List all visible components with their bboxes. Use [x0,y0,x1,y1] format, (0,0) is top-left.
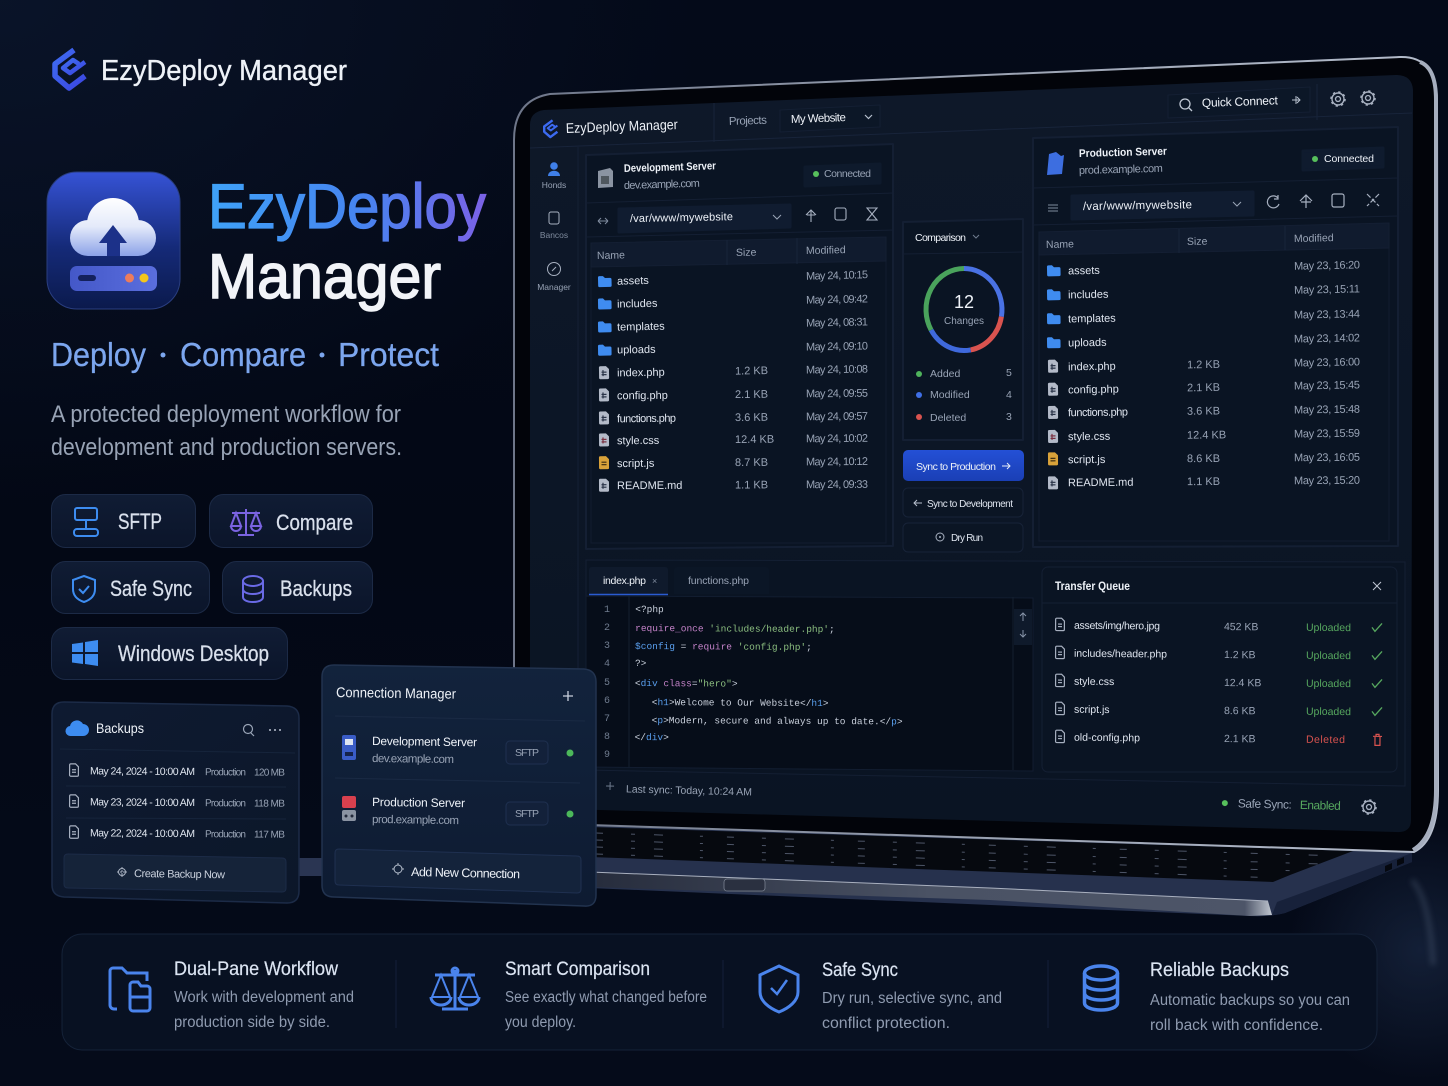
button: add connection: Add New Connection [411,865,520,881]
feature: reliable backups: roll back with confidence. [1150,1017,1323,1034]
sidebar [537,147,578,810]
feature: safe sync: conflict protection. [822,1015,950,1032]
file list: May 23, 15:45 [1294,379,1360,392]
queue row [1056,730,1382,746]
backup row: May 24, 2024 - 10:00 AM [90,765,195,778]
backup row: Production [205,829,246,840]
button: dry run [903,523,1023,552]
file list: style.css [1068,431,1111,443]
tagline: Deploy [51,336,146,373]
queue row: 452 KB [1224,621,1258,633]
legend: Modified [930,389,970,401]
donut center: 12 [954,292,974,312]
file list: script.js [1068,454,1106,466]
icon: cloud [65,720,89,736]
file list: 1.2 KB [735,365,768,378]
project selector [780,105,880,132]
file list: README.md [1068,477,1133,489]
file list: includes [617,298,658,311]
queue row: includes/header.php [1074,648,1167,661]
icons: settings [1331,91,1375,106]
queue row [1056,646,1382,662]
path bar: /var/www/mywebsite [630,211,733,225]
projects label: Projects [729,115,767,128]
panel: transfer queue [1042,567,1397,772]
icon: database [1084,966,1118,1010]
code: ?> [635,658,647,669]
panel: code editor [586,567,1033,771]
card heading: Connection Manager [336,684,456,702]
connection: development [342,734,574,766]
file list: May 24, 09:10 [806,340,868,353]
file table header: Modified [1294,232,1334,245]
legend: 3 [1006,411,1012,423]
file list: May 23, 15:20 [1294,475,1360,487]
quick connect: Quick Connect [1202,93,1279,110]
file list: May 24, 09:33 [806,479,868,491]
file list: config.php [617,390,668,402]
path bar [1048,192,1379,219]
icon: plus [563,691,573,701]
icon: brand logo [55,50,85,88]
line numbers: 3 [604,641,610,652]
backup row: 118 MB [254,799,285,810]
line numbers: 7 [604,714,610,725]
icon: manager [548,262,560,276]
icon: backup [549,212,559,224]
feature: smart comparison: See exactly what changed before [505,989,707,1006]
legend: Deleted [930,412,966,424]
file list: 8.7 KB [735,457,768,469]
backup row: 117 MB [254,830,285,841]
file list: 1.1 KB [735,479,768,492]
feature: dual-pane workflow: Dual-Pane Workflow [174,959,338,980]
file list: 1.1 KB [1187,476,1220,488]
queue row: Uploaded [1306,650,1351,662]
connection: development: Development Server [372,734,477,749]
queue row: style.css [1074,676,1114,688]
icon: status settings [1362,800,1376,814]
app header bar [530,84,1412,148]
file list: May 24, 10:02 [806,433,868,445]
queue row [1056,702,1382,718]
file list: May 23, 13:44 [1294,308,1360,321]
status bar [606,781,1341,813]
tagline: Compare [180,336,306,373]
brand name: EzyDeploy Manager [101,55,347,87]
queue row: Uploaded [1306,678,1351,690]
file list: 12.4 KB [1187,429,1226,442]
donut center: Changes [944,316,984,327]
file table header: Name [1046,238,1074,251]
status pill [1303,148,1383,170]
icon: app logo [544,120,557,137]
line numbers: 6 [604,696,610,707]
feature strip [62,934,1377,1050]
code: require_once 'includes/header.php'; [635,623,835,635]
button: create backup [64,854,286,892]
icon: folders [110,968,150,1011]
backup row: 120 MB [254,768,285,779]
file list: May 23, 15:48 [1294,404,1360,416]
queue row: old-config.php [1074,732,1140,744]
description: A protected deployment workflow for [51,401,401,428]
backup row [70,795,285,810]
feature: smart comparison: Smart Comparison [505,959,650,980]
file list: 8.6 KB [1187,453,1220,465]
feature: dual-pane workflow: Work with development and [174,989,354,1006]
file list: May 24, 09:55 [806,388,868,400]
description: development and production servers. [51,434,402,461]
tab: index.php: index.php [603,575,646,587]
file table header: Size [1187,236,1208,248]
file list: 1.2 KB [1187,359,1220,371]
connection: production: Production Server [372,795,465,810]
file list: 2.1 KB [1187,382,1220,394]
tab: functions.php [674,567,769,594]
server icon [1047,152,1064,175]
queue row: 1.2 KB [1224,649,1256,661]
tab: index.php [589,567,668,594]
server title: prod.example.com [1079,163,1163,177]
donut chart [926,268,1002,351]
button: sync to development: Sync to Development [927,499,1013,510]
file list: May 24, 09:57 [806,411,868,423]
line numbers: 8 [604,732,610,743]
file list: README.md [617,480,682,492]
chip: Windows Desktop: Windows Desktop [118,641,269,666]
file list: May 24, 10:08 [806,363,868,376]
card tools [244,724,281,736]
brand header [55,50,347,88]
feature: reliable backups: Reliable Backups [1150,960,1289,981]
feature: reliable backups: Automatic backups so you can [1150,992,1350,1009]
feature: safe sync [760,960,1002,1032]
file table header: Modified [806,244,846,257]
laptop [298,57,1438,916]
backup row [70,764,285,779]
file list: functions.php [1068,406,1128,419]
sidebar: Manager [537,282,571,292]
code: <p>Modern, secure and always up to date.</p> [652,715,903,727]
chip: Compare [210,494,372,548]
chip: Compare: Compare [276,510,353,535]
title: Manager [208,242,441,312]
panel: comparison [903,219,1023,440]
editor side toolbar [1013,597,1032,770]
queue row: Uploaded [1306,706,1351,718]
feature: dual-pane workflow: production side by side. [174,1014,330,1031]
button: dry run: Dry Run [951,533,983,544]
file list: uploads [1068,337,1107,349]
file list: config.php [1068,384,1119,396]
file list: May 23, 16:00 [1294,356,1360,369]
title: EzyDeploy [208,172,486,242]
project selector: My Website [791,112,846,126]
laptop lid and bezel [514,57,1438,852]
panel: comparison: Comparison [915,232,966,244]
queue row: Deleted [1306,734,1345,746]
connection: production [342,795,574,827]
queue row: script.js [1074,704,1110,716]
feature: dual-pane workflow [110,959,354,1031]
icon: person [548,162,560,176]
file list: functions.php [617,413,676,425]
file list: templates [617,321,665,334]
button: sync to development [903,488,1023,517]
title [208,172,486,312]
connection: development: SFTP [515,747,539,759]
feature: smart comparison: you deploy. [505,1014,576,1031]
icon: scales [431,968,479,1009]
code: $config = require 'config.php'; [635,641,812,653]
line numbers: 2 [604,623,610,634]
legend [916,367,1012,424]
laptop base [298,825,1412,916]
code: <div class="hero"> [635,678,738,690]
feature: reliable backups [1084,960,1350,1034]
chip: Backups: Backups [280,576,352,601]
file list: May 23, 16:05 [1294,452,1360,464]
file list: assets [1068,265,1100,277]
app name: EzyDeploy Manager [566,116,678,136]
status bar: Enabled [1300,798,1341,813]
file list: 2.1 KB [735,389,768,401]
tab: functions.php: functions.php [688,575,749,587]
feature: smart comparison [431,959,707,1031]
file list: style.css [617,435,660,447]
queue row: 8.6 KB [1224,705,1256,717]
file list: 3.6 KB [735,412,768,424]
panel: development server [586,144,893,549]
queue row: assets/img/hero.jpg [1074,620,1160,632]
sidebar: Honds [542,180,566,190]
chip: Windows Desktop [52,628,288,680]
file list: includes [1068,289,1109,301]
queue row: 12.4 KB [1224,677,1261,689]
file list: May 23, 15:59 [1294,428,1360,440]
description [51,401,402,461]
backup row: May 22, 2024 - 10:00 AM [90,827,195,840]
file list: templates [1068,313,1116,325]
server title: Development Server [624,160,717,175]
app screen [530,75,1413,832]
code: <?php [635,604,664,615]
file list: index.php [617,367,665,379]
donut center [944,292,984,327]
button: sync to production [903,450,1024,481]
line numbers [604,605,610,761]
path bar [598,205,877,232]
file list: May 23, 14:02 [1294,332,1360,345]
tagline [51,336,439,373]
server title [1079,146,1168,177]
queue row [1056,674,1382,690]
file table header: Size [736,247,757,259]
path bar: /var/www/mywebsite [1083,199,1192,213]
file list: 12.4 KB [735,434,774,446]
file table header [1039,223,1389,255]
button: create backup: Create Backup Now [134,868,225,881]
chip: Safe Sync [52,562,210,614]
quick connect [1168,87,1310,118]
file list: May 23, 16:20 [1294,259,1360,273]
backup row: Production [205,767,246,778]
server title [624,160,717,192]
panel: backups card [52,702,299,903]
tagline: Protect [338,336,439,373]
legend: 4 [1006,389,1012,401]
queue row [1056,618,1382,634]
code: <h1>Welcome to Our Website</h1> [652,697,829,709]
feature: safe sync: Dry run, selective sync, and [822,990,1002,1007]
queue row: 2.1 KB [1224,733,1256,745]
file list: script.js [617,458,655,470]
backup row: Production [205,798,246,809]
queue row: Uploaded [1306,622,1351,634]
line numbers: 5 [604,678,610,689]
server title: dev.example.com [624,178,700,192]
chip: Backups [222,562,372,614]
file list: May 23, 15:11 [1294,283,1360,297]
status bar: Safe Sync: [1238,796,1292,812]
backup row [70,826,285,841]
panel: bottom workspace [586,560,1405,786]
chip: Safe Sync: Safe Sync [110,576,192,601]
file list: 3.6 KB [1187,405,1220,418]
line numbers: 1 [604,605,610,616]
server title: Production Server [1079,146,1168,160]
file list: May 24, 08:31 [806,316,868,330]
icon: app icon [47,172,180,309]
button: sync to production: Sync to Production [916,461,996,473]
line numbers: 4 [604,659,610,670]
line numbers: 9 [604,750,610,761]
code: </div> [635,732,669,743]
file list: index.php [1068,361,1116,373]
sidebar: Bancos [540,230,568,240]
file list: May 24, 10:12 [806,456,868,468]
icon: shield [760,966,798,1012]
code [635,604,903,744]
tab: index.php: × [652,576,657,586]
file list: May 24, 10:15 [806,269,868,283]
status pill [805,164,880,186]
button: add connection [335,849,581,893]
backup row: May 23, 2024 - 10:00 AM [90,796,195,809]
legend: 5 [1006,367,1012,379]
status bar: Last sync: Today, 10:24 AM [626,783,752,799]
file list [598,269,868,492]
card heading: Backups [96,720,144,736]
feature: safe sync: Safe Sync [822,960,898,981]
panel: production server [1033,127,1398,547]
connection: production: prod.example.com [372,814,459,827]
chip: SFTP [52,494,196,548]
chip: SFTP: SFTP [118,509,162,534]
file list: assets [617,275,650,288]
file table header [591,237,886,267]
file list [1047,259,1360,489]
file table header: Name [597,249,625,262]
panel: connection manager [322,665,596,906]
file list: uploads [617,344,656,356]
status pill: Connected [824,168,871,180]
status pill: Connected [1324,153,1374,165]
connection: production: SFTP [515,808,539,820]
file list: May 24, 09:42 [806,293,868,307]
connection: development: dev.example.com [372,753,454,766]
legend: Added [930,368,961,380]
server icon [598,168,613,188]
panel: transfer queue: Transfer Queue [1055,581,1130,593]
